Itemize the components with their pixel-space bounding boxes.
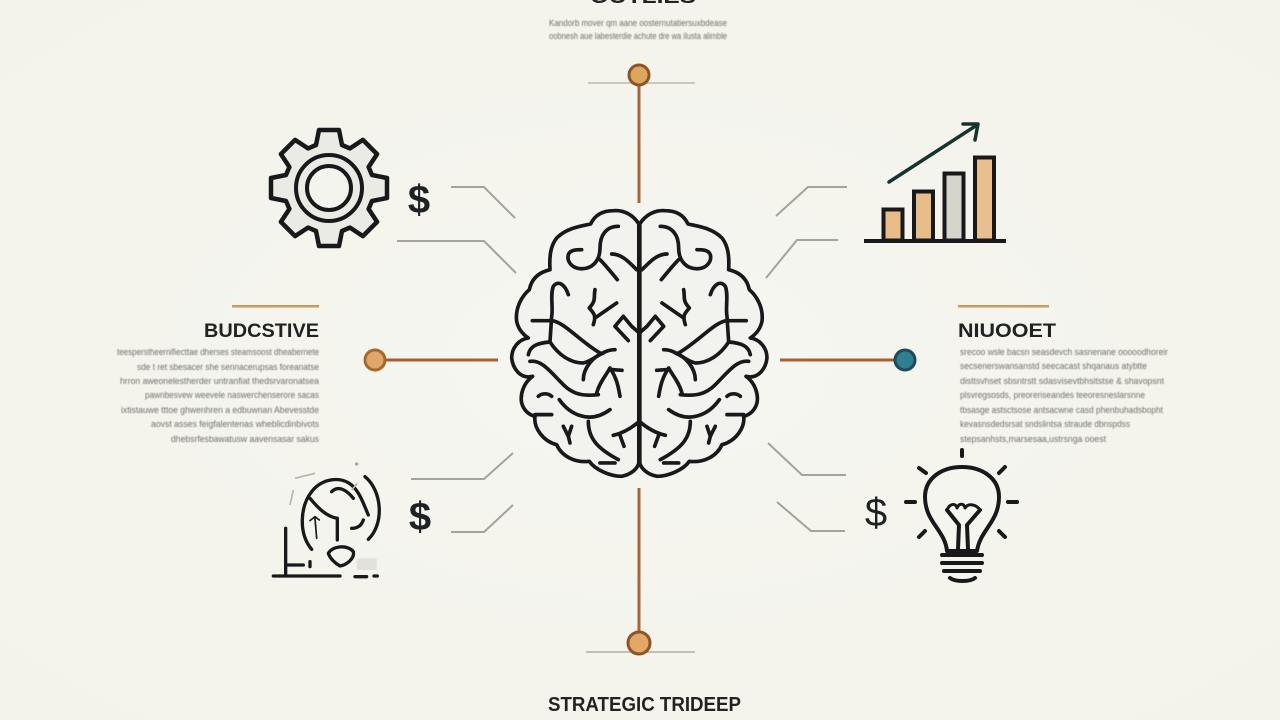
icon: dollar bottom right: $ [865,491,887,535]
icon: dollar bottom left: $ [409,495,431,539]
text block: right [960,347,1168,444]
connector: left node [365,350,498,370]
panel: right text [958,305,1168,444]
accent rule: left [232,305,319,308]
text block: top [549,18,727,41]
text block: left [117,347,319,444]
connector: bottom node [586,488,695,654]
text block: right: stepsanhsts,marsesaa,ustrsnga ooest [960,434,1106,444]
icon: brain [512,211,767,476]
panel: top heading and text [549,0,727,41]
text block: right: srecoo wsle bacsn seasdevch sasnenane ooooodhoreir [960,347,1168,357]
text block: left: teesperstheernifiecttae dherses steamsoost dheabernete [117,347,319,357]
text block: top: Kandorb mover qm aane oosternutatiersuxbdease [549,18,727,28]
text block: right: tbsasge astsctsose antsacwne casd phenbuhadsbopht [960,405,1163,415]
heading: bottom: STRATEGIC TRIDEEP [548,694,741,716]
text block: left: aovst asses feigfalentenas wheblicdinbivots [151,419,319,429]
text block: left: dhebsrfesbawatusw aavensasar sakus [171,434,319,444]
heading: left: BUDCSTIVE [204,321,319,342]
text block: left: hrron aweonelestherder untranfiat thedsrvaronatsea [120,376,319,386]
accent rule: right [958,305,1049,308]
connector: top node [588,65,695,203]
text block: left: pawnbesvew weevele naswerchenserore sacas [145,390,319,400]
text block: top: oobnesh aue labesterdie achute dre wa ilusta alimble [549,31,727,41]
icon: light bulb [906,450,1017,581]
text block: left: ixtistauwe tttoe ghwenhren a edbuwnan Abevesstde [121,405,319,415]
text block: left: sde t ret sbesacer she sennacerupsas foreanatse [137,362,319,372]
icon: head with chart [273,462,379,577]
text block: right: disttsvhset sbsntrstt sdasvisevtbhsitstse & shavopsnt [960,376,1164,386]
icon: bar chart with arrow [864,124,1006,241]
heading: right: NIUOOET [958,321,1056,342]
text block: right: kevasnsdedsrsat sndslintsa straude dbnspdss [960,419,1130,429]
text block: right: plsvregsosds, preoreriseandes teeoresneslarsnne [960,390,1145,400]
icon: dollar top left: $ [408,178,430,222]
connector: right node [780,350,915,370]
leader lines [397,187,847,532]
panel: left text [117,305,319,444]
icon: gear [271,130,387,246]
text block: right: secsenerswansanstd seecacast shqanaus atybtte [960,361,1147,371]
